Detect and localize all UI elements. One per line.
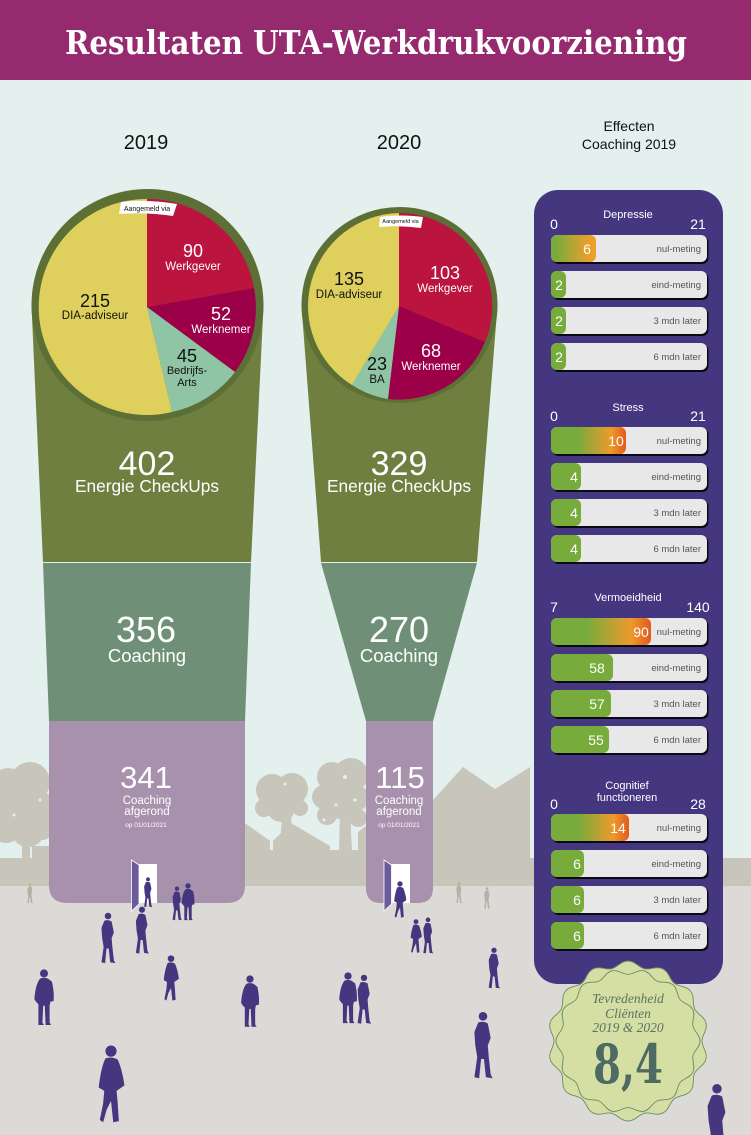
group: cognitief functioneren: 28	[690, 796, 706, 812]
group: cognitief functioneren: 6 mdn later	[653, 931, 701, 942]
group: vermoeidheid	[550, 592, 710, 755]
group: depressie: 2	[555, 313, 563, 329]
foreground people	[34, 877, 727, 1135]
funnel 2020	[302, 306, 498, 903]
heading: effecten coaching 2019: Effecten	[603, 118, 655, 134]
label: aangemeld via 2019	[119, 201, 177, 216]
group: depressie	[550, 209, 708, 372]
slice label: ba: 23	[367, 354, 387, 374]
slice label: bedrijfsarts: Arts	[177, 377, 197, 389]
slice label: dia-adviseur: DIA-adviseur	[316, 289, 382, 301]
slice label: dia-adviseur: DIA-adviseur	[62, 310, 128, 322]
slice label: dia-adviseur: 215	[80, 291, 110, 311]
group: stress: nul-meting	[657, 436, 701, 447]
heading: effecten coaching 2019: Coaching 2019	[582, 136, 676, 152]
group: cognitief functioneren: 3 mdn later	[653, 895, 701, 906]
group: cognitief functioneren: eind-meting	[651, 859, 701, 870]
tree canopy gaps	[0, 775, 357, 858]
group: vermoeidheid: 3 mdn later	[653, 699, 701, 710]
slice label: bedrijfsarts: 45	[177, 346, 197, 366]
group: cognitief functioneren: 6	[573, 892, 581, 908]
funnel 2019	[32, 306, 264, 903]
group: vermoeidheid: eind-meting	[651, 663, 701, 674]
slice label: dia-adviseur: 135	[334, 269, 364, 289]
group: depressie: Depressie	[603, 209, 653, 221]
group: vermoeidheid: 140	[686, 599, 710, 615]
group: depressie: 0	[550, 216, 558, 232]
funnel stage: coaching afgerond 2020	[366, 721, 433, 903]
stat: 341 coaching afgerond: op 01/01/2021	[125, 822, 167, 829]
group: stress: 4	[570, 541, 578, 557]
stat: 115 coaching afgerond: Coaching	[375, 795, 423, 807]
group: stress: eind-meting	[651, 472, 701, 483]
slice label: werknemer: 68	[421, 341, 441, 361]
slice label: bedrijfsarts: Bedrijfs-	[167, 365, 208, 377]
pie chart 2019	[32, 189, 264, 421]
group: stress: 0	[550, 408, 558, 424]
group: vermoeidheid: nul-meting	[657, 627, 701, 638]
stat: 402 energie checkups: 402	[119, 445, 175, 483]
group: cognitief functioneren: 6	[573, 856, 581, 872]
group: stress: 4	[570, 505, 578, 521]
group: cognitief functioneren: nul-meting	[657, 823, 701, 834]
stat: 329 energie checkups: Energie CheckUps	[327, 476, 471, 496]
panel: effecten coaching	[534, 190, 723, 984]
slice label: werknemer: Werknemer	[191, 324, 251, 336]
group: depressie: nul-meting	[657, 244, 701, 255]
group: stress: 21	[690, 408, 706, 424]
trees and buildings skyline	[0, 758, 751, 886]
group: vermoeidheid: 58	[589, 660, 605, 676]
group: stress: 4	[570, 469, 578, 485]
funnel stage: coaching 2019	[43, 563, 251, 721]
group: cognitief functioneren: 0	[550, 796, 558, 812]
title banner: Resultaten UTA-Werkdrukvoorziening	[65, 23, 687, 62]
slice label: werkgever: Werkgever	[417, 283, 473, 295]
group: cognitief functioneren: 6	[573, 928, 581, 944]
label: aangemeld via 2019: Aangemeld via	[124, 206, 170, 213]
funnel stage: coaching 2020	[321, 563, 477, 721]
slice label: werkgever: Werkgever	[165, 261, 221, 273]
stat: 341 coaching afgerond: 341	[120, 760, 172, 795]
group: cognitief functioneren: 14	[610, 820, 626, 836]
group: stress: 10	[608, 433, 624, 449]
funnel stage: energie checkups 2020	[302, 306, 498, 562]
group: depressie: 2	[555, 349, 563, 365]
background people	[27, 882, 490, 909]
pie chart 2020	[302, 207, 498, 403]
heading: 2019: 2019	[124, 132, 168, 154]
group: stress	[550, 402, 708, 564]
stat: 115 coaching afgerond: op 01/01/2021	[378, 822, 420, 829]
door 2019	[132, 860, 157, 911]
group: depressie: 6 mdn later	[653, 352, 701, 363]
stat: 341 coaching afgerond: afgerond	[124, 806, 170, 818]
stat: 115 coaching afgerond: 115	[375, 760, 425, 795]
stat: 341 coaching afgerond: Coaching	[123, 795, 171, 807]
stat: 270 coaching: Coaching	[360, 645, 438, 666]
stat: 402 energie checkups: Energie CheckUps	[75, 476, 219, 496]
group: vermoeidheid: 6 mdn later	[653, 735, 701, 746]
group: cognitief functioneren: Cognitief	[605, 780, 650, 792]
badge: tevredenheid clienten: 2019 & 2020	[592, 1020, 664, 1035]
group: depressie: 2	[555, 277, 563, 293]
funnel stage: energie checkups 2019	[32, 306, 264, 562]
slice label: werkgever: 103	[430, 263, 460, 283]
slice label: werknemer: Werknemer	[401, 361, 461, 373]
group: stress: 6 mdn later	[653, 544, 701, 555]
label: aangemeld via 2020	[379, 216, 423, 228]
badge: tevredenheid clienten	[540, 954, 716, 1128]
group: depressie: 6	[583, 241, 591, 257]
badge: tevredenheid clienten: Cliënten	[605, 1006, 651, 1021]
group: vermoeidheid: 90	[633, 624, 649, 640]
ground	[0, 886, 751, 1135]
group: stress: 3 mdn later	[653, 508, 701, 519]
badge: tevredenheid clienten: Tevredenheid	[592, 991, 664, 1006]
stat: 356 coaching: 356	[116, 609, 176, 650]
group: vermoeidheid: 57	[589, 696, 605, 712]
stat: 356 coaching: Coaching	[108, 645, 186, 666]
group: vermoeidheid: 55	[588, 732, 604, 748]
group: cognitief functioneren: functioneren	[597, 792, 657, 804]
group: depressie: 21	[690, 216, 706, 232]
title banner	[0, 0, 751, 80]
label: aangemeld via 2020: Aangemeld via	[382, 219, 420, 225]
slice label: ba: BA	[369, 374, 385, 386]
stat: 329 energie checkups: 329	[371, 445, 427, 483]
group: stress: Stress	[612, 402, 644, 414]
group: vermoeidheid: 7	[550, 599, 558, 615]
heading: 2020: 2020	[377, 132, 421, 154]
group: depressie: 3 mdn later	[653, 316, 701, 327]
funnel stage: coaching afgerond 2019	[49, 721, 245, 903]
stat: 270 coaching: 270	[369, 609, 429, 650]
group: depressie: eind-meting	[651, 280, 701, 291]
stat: 115 coaching afgerond: afgerond	[376, 806, 422, 818]
slice label: werknemer: 52	[211, 304, 231, 324]
badge: tevredenheid clienten: 8,4	[593, 1032, 663, 1096]
slice label: werkgever: 90	[183, 241, 203, 261]
door 2020	[384, 860, 410, 911]
group: cognitief functioneren	[550, 780, 708, 951]
group: vermoeidheid: Vermoeidheid	[594, 592, 662, 604]
